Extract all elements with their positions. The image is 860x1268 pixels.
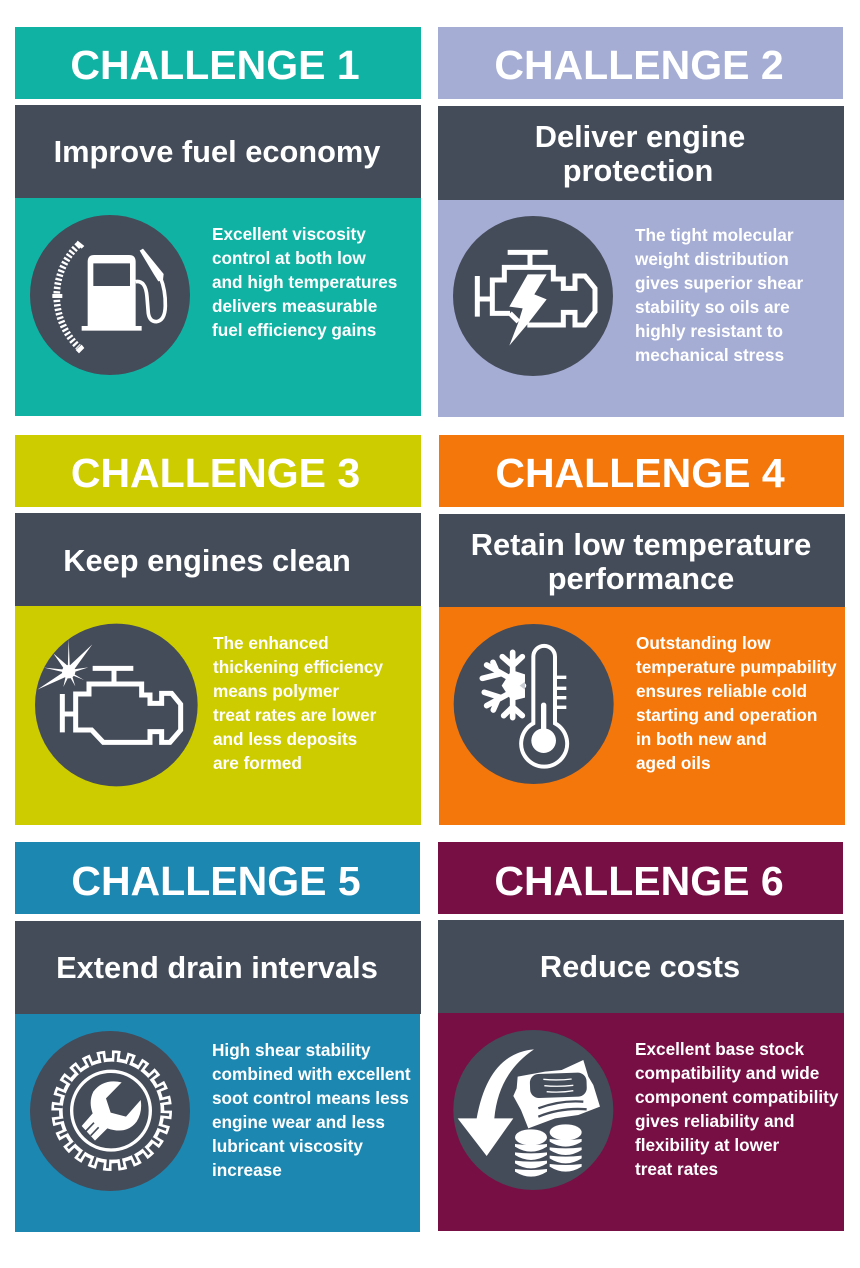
text: challenge 3 description: and less deposits	[213, 729, 357, 749]
subheading: extend drain intervals	[15, 921, 421, 1014]
heading: challenge 3: CHALLENGE 3	[71, 450, 360, 496]
icon: gear with wrench	[30, 1031, 190, 1191]
text: challenge 6 description: compatibility and wide	[635, 1063, 819, 1083]
body background	[438, 1013, 844, 1231]
text: challenge 5 description: High shear stability	[212, 1040, 371, 1060]
subheading: reduce costs: Reduce costs	[540, 949, 740, 984]
text: challenge 5 description: increase	[212, 1160, 282, 1180]
subheading: extend drain intervals: Extend drain intervals	[56, 950, 378, 985]
text: challenge 6 description: flexibility at lower	[635, 1135, 780, 1155]
text: challenge 2 description: mechanical stress	[635, 345, 784, 365]
subheading: improve fuel economy: Improve fuel economy	[54, 134, 380, 169]
heading: challenge 3	[15, 435, 421, 507]
panel: challenge 3	[15, 435, 421, 825]
text: challenge 4 description: Outstanding low	[636, 633, 771, 653]
panel: challenge 1	[15, 27, 421, 416]
heading: challenge 2: CHALLENGE 2	[494, 42, 784, 88]
text: challenge 5 description: engine wear and less	[212, 1112, 385, 1132]
text: challenge 6 description: Excellent base stock	[635, 1039, 805, 1059]
subheading: deliver engine protection	[438, 106, 844, 200]
text: challenge 3 description: The enhanced	[213, 633, 329, 653]
text: challenge 5 description: lubricant viscosity	[212, 1136, 363, 1156]
text: challenge 3 description: means polymer	[213, 681, 339, 701]
subheading: retain low temperature performance: performance	[548, 561, 734, 596]
panel: challenge 5	[15, 842, 421, 1232]
text: challenge 6 description: treat rates	[635, 1159, 718, 1179]
text: challenge 5 description: combined with excellent	[212, 1064, 411, 1084]
text: challenge 2 description: stability so oils are	[635, 297, 790, 317]
icon: snowflake and thermometer	[454, 624, 614, 784]
text: challenge 4 description: aged oils	[636, 753, 710, 773]
heading: challenge 1	[15, 27, 421, 99]
heading: challenge 5: CHALLENGE 5	[71, 858, 361, 904]
subheading: retain low temperature performance: Retain low temperature	[471, 527, 811, 562]
text: challenge 6 description: gives reliability and	[635, 1111, 795, 1131]
icon: fuel pump with gauge	[30, 215, 190, 375]
body background	[15, 198, 421, 416]
text: challenge 5 description: soot control means less	[212, 1088, 409, 1108]
subheading: reduce costs	[438, 920, 844, 1013]
icon: down arrow, banknote and coins	[453, 1030, 613, 1190]
text: challenge 6 description: component compatibility	[635, 1087, 839, 1107]
text: challenge 1 description: and high temperatures	[212, 272, 397, 292]
body background	[439, 607, 845, 825]
heading: challenge 5	[15, 842, 420, 914]
subheading: deliver engine protection: protection	[563, 153, 713, 188]
heading: challenge 6	[438, 842, 843, 914]
subheading: retain low temperature performance	[439, 514, 845, 607]
text: challenge 4 description: starting and operation	[636, 705, 817, 725]
subheading: improve fuel economy	[15, 105, 421, 198]
text: challenge 1 description: fuel efficiency gains	[212, 320, 376, 340]
text: challenge 4 description: in both new and	[636, 729, 767, 749]
panel: challenge 4	[439, 435, 845, 825]
text: challenge 3 description: are formed	[213, 753, 302, 773]
heading: challenge 4: CHALLENGE 4	[495, 450, 785, 496]
body background	[15, 1014, 420, 1232]
text: challenge 1 description: Excellent viscosity	[212, 224, 366, 244]
panel: challenge 6	[438, 842, 844, 1231]
text: challenge 3 description: thickening efficiency	[213, 657, 383, 677]
panel: challenge 2	[438, 27, 844, 417]
heading: challenge 4	[439, 435, 844, 507]
heading: challenge 1: CHALLENGE 1	[70, 42, 360, 88]
text: challenge 2 description: gives superior shear	[635, 273, 803, 293]
heading: challenge 6: CHALLENGE 6	[494, 858, 784, 904]
body background	[438, 200, 844, 417]
text: challenge 2 description: The tight molecular	[635, 225, 794, 245]
text: challenge 4 description: temperature pumpability	[636, 657, 837, 677]
body background	[15, 606, 421, 825]
text: challenge 2 description: highly resistant to	[635, 321, 783, 341]
text: challenge 2 description: weight distribution	[634, 249, 789, 269]
icon: engine with sparkle	[35, 624, 198, 786]
icon: engine with lightning bolt	[453, 216, 613, 376]
text: challenge 1 description: delivers measurable	[212, 296, 377, 316]
subheading: deliver engine protection: Deliver engine	[535, 119, 745, 154]
heading: challenge 2	[438, 27, 843, 99]
subheading: keep engines clean: Keep engines clean	[63, 543, 351, 578]
text: challenge 4 description: ensures reliable cold	[636, 681, 807, 701]
text: challenge 1 description: control at both low	[212, 248, 366, 268]
subheading: keep engines clean	[15, 513, 421, 606]
text: challenge 3 description: treat rates are lower	[213, 705, 377, 725]
